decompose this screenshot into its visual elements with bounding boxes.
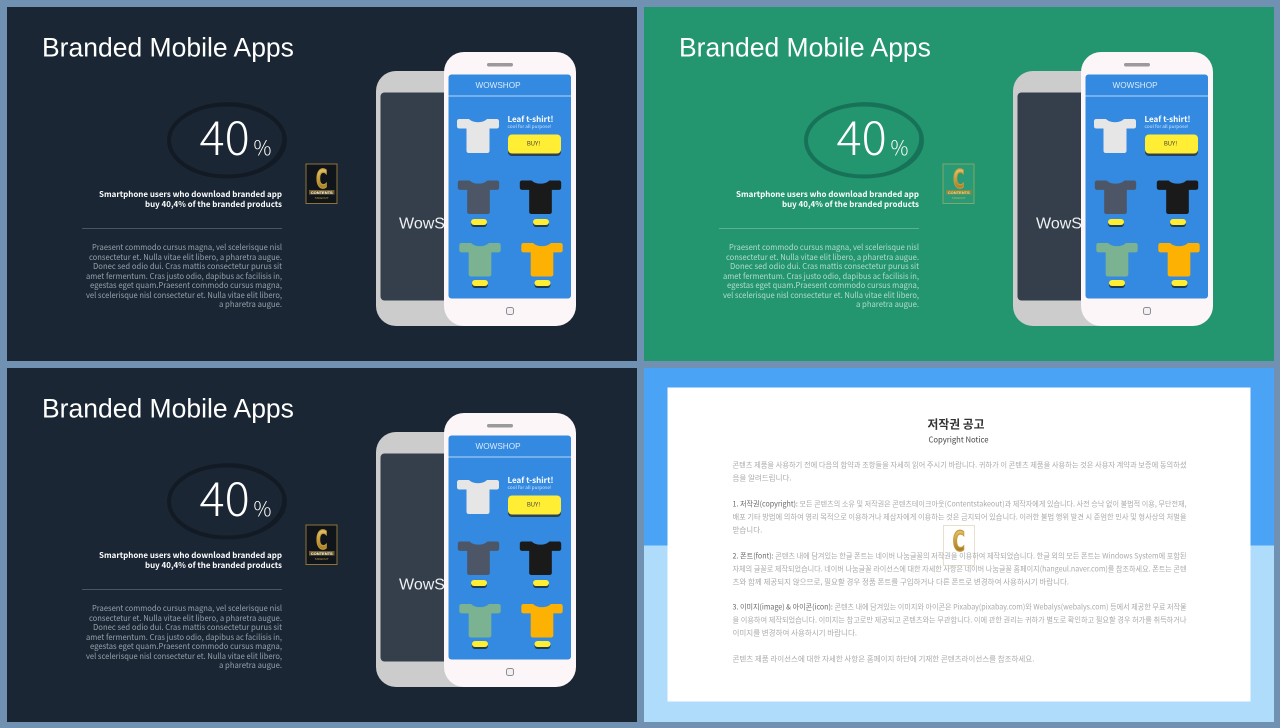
clause 2: 자체의 글꼴로 제작되었습니다. 네이버 나눔글꼴 라이선스에 대한 자세한 사항은 네이버 나눔글꼴 홈페이지(hangeul.naver.com)를 참조하세요. 폰트는 콘텐: [732, 563, 1186, 574]
body paragraph: [722, 242, 918, 310]
hand drawn circle: [804, 100, 922, 180]
clause 3: 을 이용하여 제작되었습니다. 이미지는 참고로만 제공되고 콘텐츠와는 무관합니다. 이에 관한 권리는 귀하가 별도로 확인하고 필요할 경우 허가를 취득하거나: [732, 614, 1186, 625]
back phone: [1012, 71, 1122, 326]
front phone: [444, 52, 576, 326]
product shirts: [458, 180, 563, 276]
logo watermark: C: [952, 526, 964, 557]
intro paragraph: 음을 알려드립니다.: [732, 472, 791, 483]
panel: dark slide bottom left: [7, 368, 637, 722]
clause 1: 배포 기타 방법에 의하여 영리 목적으로 이용하거나 제삼자에게 이용하는 것은 금지되어 있습니다. 이러한 불법 행위 발견 시 준엄한 민사 및 형사상의 처벌을: [732, 511, 1186, 522]
statistic 40%: 40: [200, 461, 250, 530]
small buttons: [471, 580, 550, 649]
buy button: [508, 134, 561, 156]
body paragraph: [86, 603, 282, 671]
body paragraph: consectetur et. Nulla vitae elit libero, a pharetra augue.: [89, 252, 282, 263]
clause 1: [732, 498, 1186, 535]
statistic 40%: 40: [200, 100, 250, 169]
panel: green slide top right: [644, 7, 1274, 361]
hand drawn circle: [167, 100, 285, 180]
logo badge: TAKEOUT: [315, 196, 329, 200]
product shirts: [458, 542, 563, 638]
body paragraph: a pharetra augue.: [219, 299, 282, 310]
body paragraph: a pharetra augue.: [856, 299, 918, 310]
statistic 40%: [836, 100, 908, 169]
heading: Branded Mobile Apps: [42, 32, 294, 62]
front phone: [1080, 52, 1212, 326]
hand drawn circle: [167, 461, 285, 541]
intro paragraph: [732, 459, 1186, 483]
buy button: BUY!: [527, 500, 540, 508]
product name: Leaf t-shirt!: [508, 475, 554, 486]
statistic 40%: [200, 100, 272, 169]
app header: WOWSHOP: [476, 442, 521, 451]
logo badge: [306, 525, 337, 564]
statistic description: buy 40,4% of the branded products: [782, 199, 918, 210]
buy button: BUY!: [1163, 138, 1177, 148]
body paragraph: vel scelerisque nisl consectetur et. Nulla vitae elit libero,: [722, 290, 918, 301]
body paragraph: [86, 242, 282, 310]
body paragraph: amet fermentum. Cras justo odio, dapibus ac facilisis in,: [86, 632, 282, 643]
intro paragraph: 콘텐츠 제품을 사용하기 전에 다음의 합약과 조항들을 자세히 읽어 주시기 바랍니다. 귀하가 이 콘텐츠 제품을 사용하는 것은 사용자 계약과 보증에 동의하셨: [732, 459, 1186, 470]
clause 1: 받습니다.: [732, 524, 762, 535]
body paragraph: vel scelerisque nisl consectetur et. Nulla vitae elit libero,: [86, 651, 282, 662]
logo badge: CONTENTS: [947, 190, 970, 195]
logo badge: [306, 164, 337, 204]
product name: [508, 475, 554, 491]
notice heading: Copyright Notice: [928, 434, 988, 445]
statistic description: [99, 189, 282, 210]
featured shirt: [1094, 119, 1136, 153]
body paragraph: amet fermentum. Cras justo odio, dapibus ac facilisis in,: [86, 271, 282, 282]
logo badge: C: [316, 526, 327, 556]
back phone: [376, 432, 486, 687]
back phone: [376, 71, 486, 326]
body paragraph: consectetur et. Nulla vitae elit libero, a pharetra augue.: [726, 252, 918, 263]
logo badge: [942, 164, 974, 204]
body paragraph: Donec sed odio dui. Cras mattis consectetur purus sit: [730, 261, 918, 272]
small buttons: [471, 219, 550, 288]
clause 2: 2. 폰트(font): 콘텐츠 내에 담겨있는 한글 폰트는 네이버 나눔글꼴의 저작권을 이용하여 제작되었습니다. 한글 외의 모든 폰트는 Windows System에 포함된: [732, 550, 1186, 561]
statistic description: buy 40,4% of the branded products: [145, 199, 282, 210]
back phone: WowShop: [399, 576, 472, 594]
statistic 40%: 40: [836, 100, 886, 169]
home button: [1143, 308, 1150, 314]
body paragraph: egestas eget quam.Praesent commodo cursus magna,: [90, 280, 282, 291]
statistic 40%: %: [254, 493, 272, 522]
clause 3: 이미지를 변경하여 사용하시기 바랍니다.: [732, 627, 856, 638]
product shirts: [1094, 180, 1199, 276]
heading: Branded Mobile Apps: [678, 32, 930, 62]
app header: WOWSHOP: [1112, 81, 1158, 90]
logo badge: CONTENTS: [311, 190, 333, 195]
body paragraph: Praesent commodo cursus magna, vel scelerisque nisl: [728, 242, 918, 253]
logo badge: C: [316, 165, 327, 195]
statistic description: buy 40,4% of the branded products: [145, 560, 282, 571]
body paragraph: Praesent commodo cursus magna, vel scelerisque nisl: [92, 242, 282, 253]
body paragraph: consectetur et. Nulla vitae elit libero, a pharetra augue.: [89, 613, 282, 624]
body paragraph: egestas eget quam.Praesent commodo cursus magna,: [726, 280, 918, 291]
logo badge: TAKEOUT: [315, 557, 329, 561]
body paragraph: amet fermentum. Cras justo odio, dapibus ac facilisis in,: [722, 271, 918, 282]
body paragraph: Donec sed odio dui. Cras mattis consectetur purus sit: [93, 622, 282, 633]
body paragraph: egestas eget quam.Praesent commodo cursus magna,: [90, 641, 282, 652]
logo badge: CONTENTS: [311, 551, 333, 556]
statistic description: Smartphone users who download branded app: [99, 550, 282, 561]
back phone: WowShop: [399, 216, 472, 232]
clause 3: 3. 이미지(image) & 아이콘(icon): 콘텐츠 내에 담겨있는 이미지와 아이콘은 Pixabay(pixabay.com)와 Webalys(webalys.com) 등에서 제공한 무료 저작물: [732, 601, 1186, 612]
small buttons: [1108, 219, 1187, 288]
statistic 40%: %: [254, 132, 272, 161]
front phone: [444, 413, 576, 687]
back phone: WowShop: [1036, 216, 1108, 232]
panel: copyright notice slide: [644, 368, 1274, 722]
logo watermark: [943, 525, 974, 565]
product name: cool for all purpose!: [1144, 123, 1189, 130]
notice heading: [927, 415, 988, 445]
heading: Branded Mobile Apps: [42, 394, 294, 424]
featured shirt: [457, 119, 499, 153]
clause 3: [732, 601, 1186, 638]
logo badge: TAKEOUT: [951, 196, 965, 200]
buy button: [1144, 134, 1198, 156]
body paragraph: a pharetra augue.: [219, 660, 282, 671]
featured shirt: [457, 480, 499, 514]
clause 1: 1. 저작권(copyright): 모든 콘텐츠의 소유 및 저작권은 콘텐츠테이크아웃(Contentstakeout)과 제작자에게 있습니다. 사전 승낙 없이 불법적 이용, 무단전재,: [732, 498, 1186, 509]
closing line: 콘텐츠 제품 라이선스에 대한 자세한 사항은 홈페이지 하단에 기재한 콘텐츠라이선스를 참조하세요.: [732, 653, 1034, 664]
home button: [506, 668, 514, 676]
app header: WOWSHOP: [476, 81, 521, 90]
statistic description: Smartphone users who download branded app: [99, 189, 282, 200]
notice heading: 저작권 공고: [927, 415, 984, 432]
statistic 40%: %: [890, 132, 908, 161]
buy button: [508, 496, 561, 517]
statistic description: [736, 189, 918, 210]
product name: cool for all purpose!: [508, 484, 552, 491]
body paragraph: Donec sed odio dui. Cras mattis consectetur purus sit: [93, 261, 282, 272]
body paragraph: Praesent commodo cursus magna, vel scelerisque nisl: [92, 603, 282, 614]
body paragraph: vel scelerisque nisl consectetur et. Nulla vitae elit libero,: [86, 290, 282, 301]
logo badge: C: [952, 165, 964, 195]
buy button: BUY!: [527, 138, 540, 148]
statistic 40%: [200, 461, 272, 530]
home button: [506, 308, 514, 314]
clause 2: 츠와 함께 제공되지 않으므로, 필요할 경우 정품 폰트를 구입하거나 다른 폰트로 변경하여 사용하시기 바랍니다.: [732, 576, 1069, 587]
product name: Leaf t-shirt!: [508, 114, 554, 125]
statistic description: [99, 550, 282, 571]
product name: cool for all purpose!: [508, 123, 552, 130]
clause 2: [732, 550, 1186, 587]
product name: Leaf t-shirt!: [1144, 114, 1190, 125]
product name: [508, 114, 554, 130]
panel: dark slide top left: [7, 7, 637, 361]
product name: [1144, 114, 1190, 130]
statistic description: Smartphone users who download branded app: [736, 189, 918, 200]
